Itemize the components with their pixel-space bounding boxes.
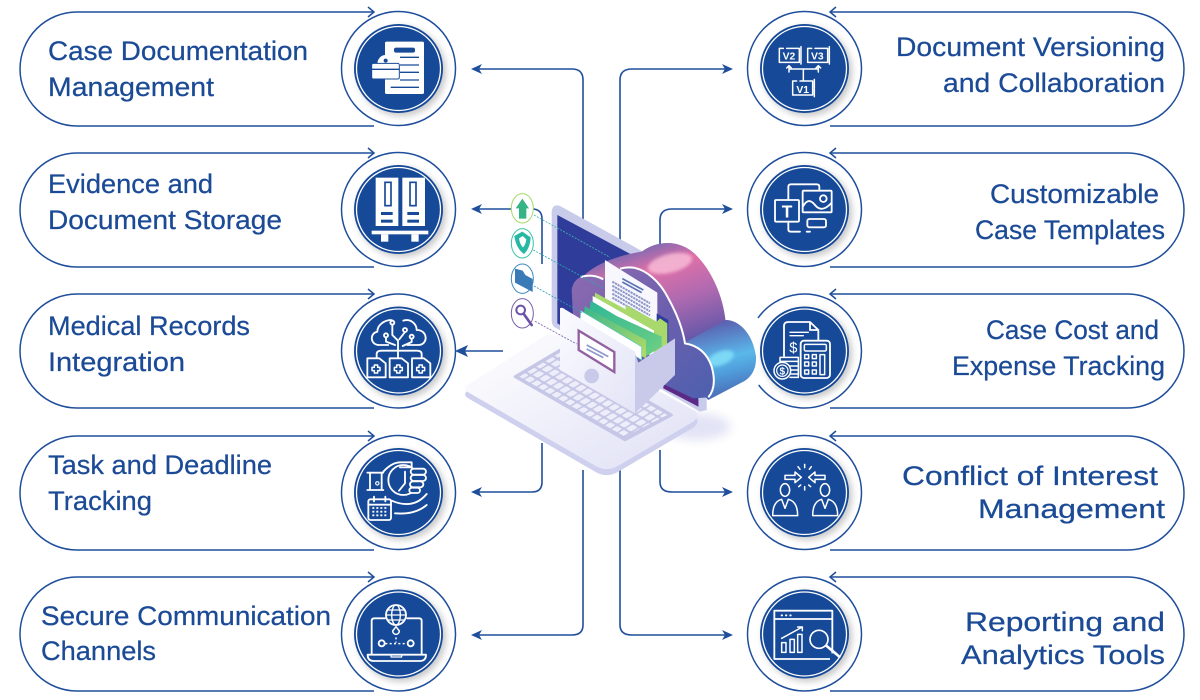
icon: analytics window [774, 611, 839, 659]
heading: Analytics Tools [961, 640, 1165, 670]
heading [48, 169, 282, 235]
icon: template layout [775, 184, 832, 232]
heading: Conflict of Interest [902, 461, 1159, 491]
icon: calculator, bill and coins: $ [780, 366, 786, 377]
icon: template layout: T [782, 201, 793, 221]
keyboard [515, 350, 672, 440]
laptop shadow [663, 413, 730, 440]
drawer label [579, 331, 614, 372]
heading [961, 607, 1165, 670]
heading [975, 179, 1165, 245]
heading: Secure Communication [41, 601, 331, 631]
panel: Case Documentation Management [20, 7, 455, 126]
heading: Evidence and [48, 169, 213, 199]
floating icon: folder [511, 264, 533, 293]
heading [41, 601, 331, 666]
laptop screen [552, 205, 707, 412]
heading: Task and Deadline [48, 450, 272, 480]
heading: Integration [48, 347, 185, 377]
icon: filing cabinets [372, 178, 428, 242]
cloud [572, 243, 756, 400]
heading: Customizable [990, 179, 1159, 209]
panel: Customizable Case Templates [748, 148, 1184, 267]
heading: Reporting and [965, 607, 1165, 637]
heading: Management [978, 494, 1166, 524]
heading: Expense Tracking [952, 351, 1165, 381]
icon: calculator, bill and coins [774, 322, 830, 379]
heading [952, 315, 1165, 381]
file folders [580, 293, 668, 360]
icon: document and briefcase [372, 42, 424, 94]
heading: Case Documentation [48, 36, 308, 66]
heading [896, 32, 1165, 98]
drawer knob [584, 369, 599, 383]
heading [902, 461, 1166, 524]
panel: Case Cost and Expense Tracking [758, 289, 1184, 408]
heading: Channels [41, 636, 156, 666]
heading [48, 450, 272, 516]
paper sheet [605, 260, 657, 343]
icon: stopwatch and calendar [367, 462, 427, 520]
heading: Case Templates [975, 215, 1165, 245]
icon: calculator, bill and coins: $ [789, 340, 797, 356]
icon: document versions: V3 [811, 52, 824, 63]
icon: two people in conflict [773, 464, 838, 516]
heading: and Collaboration [943, 68, 1165, 98]
panel: Reporting and Analytics Tools [748, 572, 1184, 691]
heading: Case Cost and [986, 315, 1159, 345]
panel: Evidence and Document Storage [20, 148, 456, 267]
panel: Secure Communication Channels [20, 572, 456, 691]
dashed link lines [533, 215, 610, 344]
heading: Document Storage [48, 205, 282, 235]
heading: Document Versioning [896, 32, 1165, 62]
icon: document versions: V1 [796, 85, 809, 96]
floating icon: shield [511, 229, 533, 258]
icon: document versions: V2 [783, 52, 796, 63]
floating icon: upload arrow [511, 194, 533, 223]
panel: Medical Records Integration [20, 289, 456, 408]
laptop base [465, 335, 697, 475]
heading [48, 36, 308, 102]
icon: cloud and medical records [367, 320, 430, 377]
panel: Conflict of Interest Management [748, 431, 1184, 550]
floating icon: magnifier [511, 299, 533, 328]
heading [48, 311, 250, 377]
icon: laptop and globe [368, 605, 426, 661]
heading: Tracking [48, 486, 152, 516]
icon: document versions [779, 47, 829, 97]
connector arrowheads [455, 64, 733, 640]
panel: Task and Deadline Tracking [20, 431, 456, 550]
central illustration: laptop with cloud and file drawer [465, 194, 756, 475]
heading: Management [48, 72, 215, 102]
file drawer [560, 308, 675, 413]
connector lines [462, 69, 728, 635]
heading: Medical Records [48, 311, 250, 341]
panel: Document Versioning and Collaboration [748, 7, 1184, 126]
